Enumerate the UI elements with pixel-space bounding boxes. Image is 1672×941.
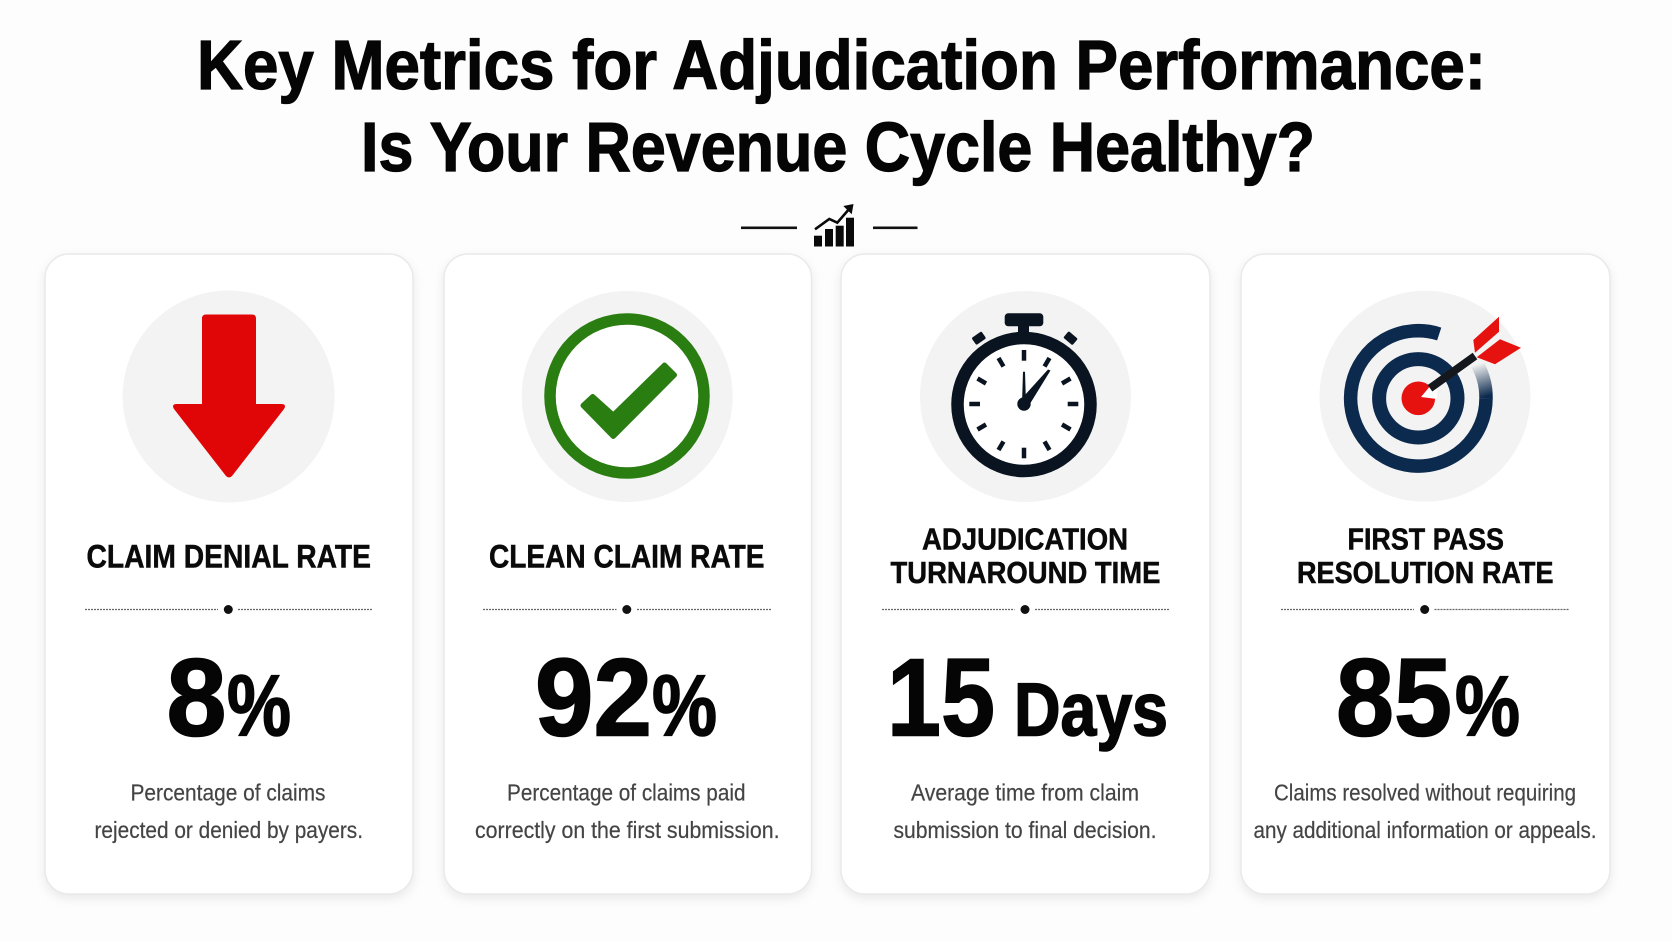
description: any additional information or appeals. xyxy=(1254,817,1596,843)
description xyxy=(94,780,363,843)
heading: adjudication turnaround time: TURNAROUND TIME xyxy=(890,555,1160,590)
metric value: 92%: 92 xyxy=(535,636,652,760)
panel: claim denial rate xyxy=(45,254,413,894)
metric value: 15 Days: 15 xyxy=(887,636,995,760)
heading: first pass resolution rate: FIRST PASS xyxy=(1348,522,1504,556)
description: Percentage of claims xyxy=(130,780,326,806)
heading: adjudication turnaround time: ADJUDICATION xyxy=(922,522,1128,556)
title: Key Metrics for Adjudication Performance: xyxy=(197,26,1486,104)
divider xyxy=(483,605,771,614)
icon: green check mark xyxy=(522,291,733,502)
icon: stopwatch xyxy=(920,291,1131,502)
panel: adjudication turnaround time xyxy=(841,254,1210,894)
metric value: 8%: 8 xyxy=(166,636,226,760)
divider xyxy=(1281,605,1568,614)
divider xyxy=(882,605,1169,614)
panel: clean claim rate xyxy=(444,254,812,894)
heading: first pass resolution rate xyxy=(1297,522,1554,590)
description xyxy=(1254,780,1596,843)
metric value: 85%: 85 xyxy=(1336,636,1452,760)
heading: claim denial rate: CLAIM DENIAL RATE xyxy=(86,538,371,574)
panel: first pass resolution rate xyxy=(1241,254,1610,894)
metric value: 8% xyxy=(166,636,291,760)
description xyxy=(475,780,780,843)
description: Percentage of claims paid xyxy=(507,780,746,806)
description: Average time from claim xyxy=(911,780,1139,806)
description: Claims resolved without requiring xyxy=(1274,780,1576,806)
heading: adjudication turnaround time xyxy=(890,522,1160,590)
metric value: 85% xyxy=(1336,636,1520,760)
icon: red down arrow xyxy=(123,290,335,502)
heading: clean claim rate: CLEAN CLAIM RATE xyxy=(489,538,764,574)
icon: target with dart xyxy=(1320,291,1530,502)
title: Is Your Revenue Cycle Healthy? xyxy=(361,108,1315,186)
metric value: 85%: % xyxy=(1455,660,1520,754)
metric value: 92% xyxy=(535,636,717,760)
divider xyxy=(85,605,373,614)
metric value: 15 Days xyxy=(887,636,1168,760)
metric value: 15 Days: Days xyxy=(1014,668,1168,752)
description: correctly on the first submission. xyxy=(475,817,780,843)
heading: first pass resolution rate: RESOLUTION RATE xyxy=(1297,555,1554,590)
description: submission to final decision. xyxy=(894,817,1156,843)
metric value: 92%: % xyxy=(652,658,717,754)
icon: growth chart header ornament xyxy=(741,204,918,246)
title xyxy=(197,26,1486,186)
description: rejected or denied by payers. xyxy=(94,817,363,843)
description xyxy=(894,780,1156,843)
metric value: 8%: % xyxy=(227,658,291,754)
